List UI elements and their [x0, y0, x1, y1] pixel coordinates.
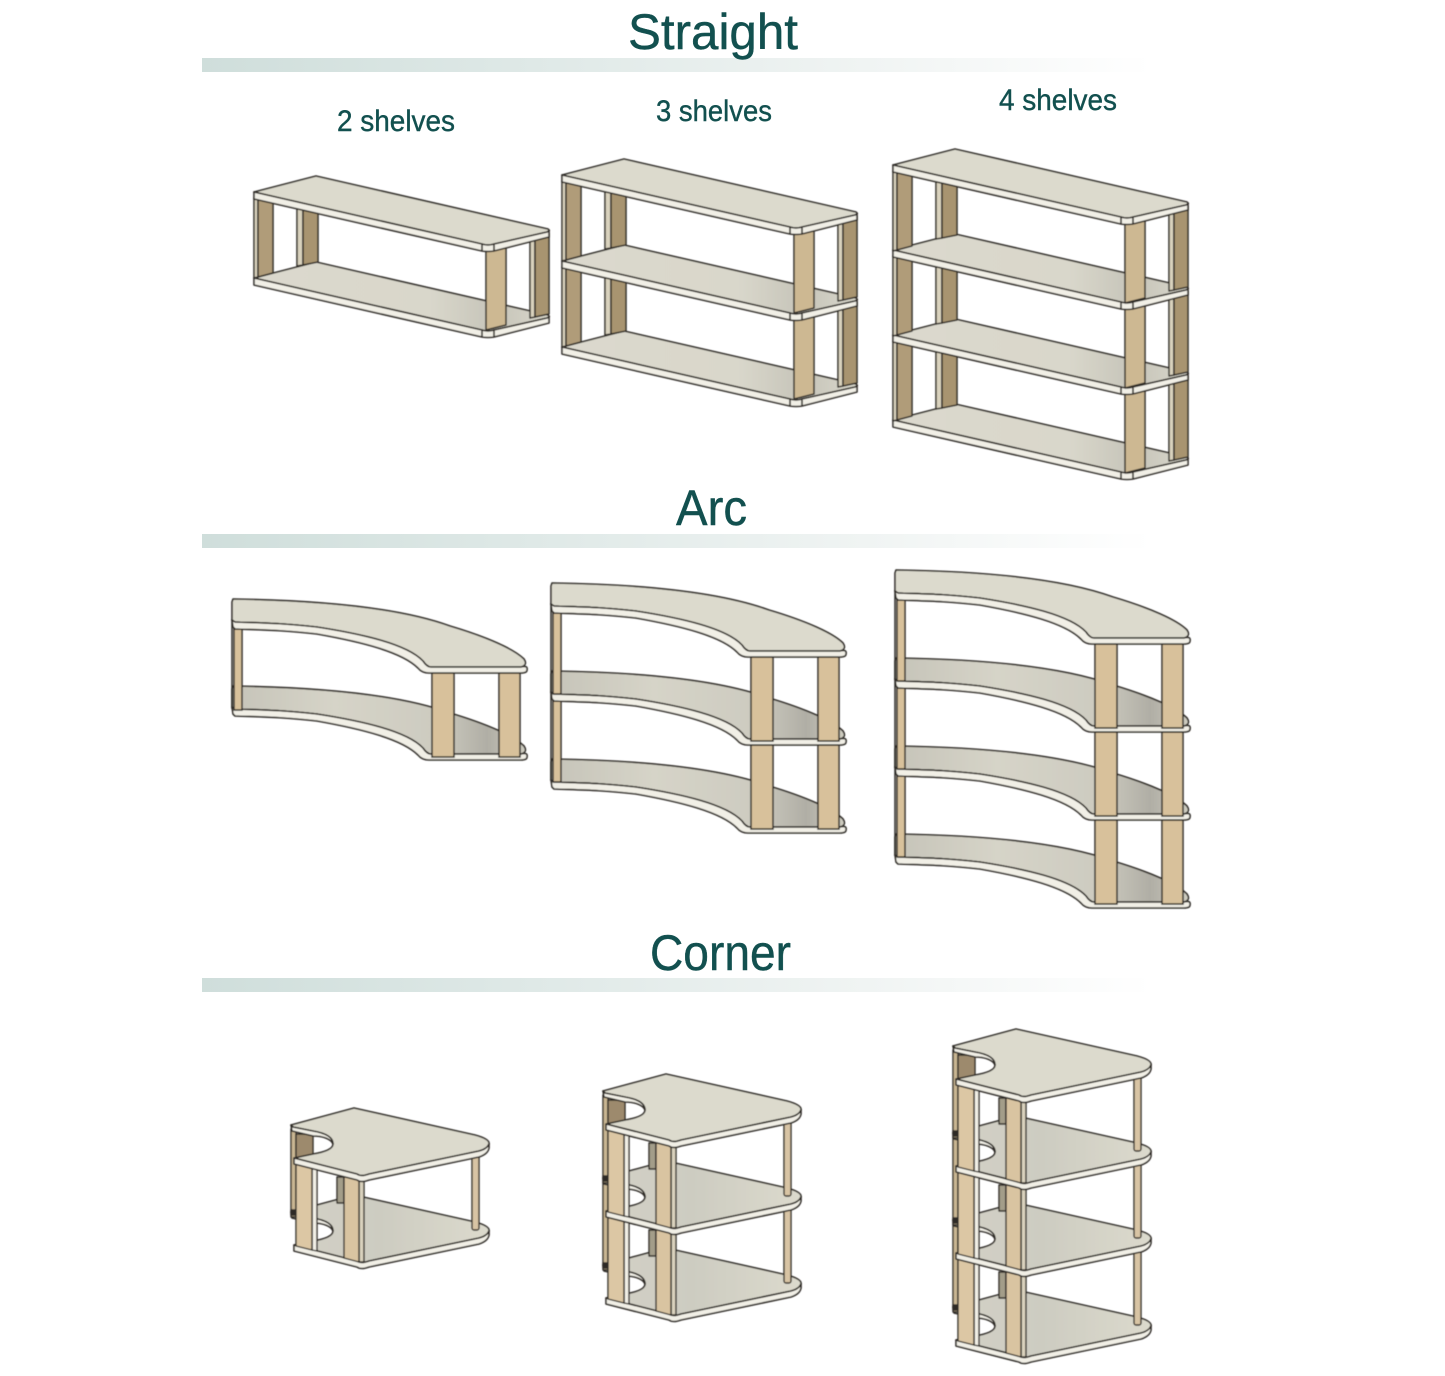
section: Straight	[202, 4, 1188, 480]
unit: straight 2 shelves	[254, 176, 549, 338]
unit: corner 4 shelves	[953, 1029, 1151, 1364]
divider bar: Straight	[202, 58, 1152, 72]
section: Corner	[202, 925, 1152, 1364]
label: 4 shelves: 4 shelves	[999, 84, 1117, 117]
divider bar: Arc	[202, 534, 1152, 548]
unit: arc 3 shelves	[551, 583, 846, 833]
unit: corner 2 shelves	[291, 1108, 489, 1268]
unit: straight 3 shelves	[562, 159, 857, 406]
section: Arc	[202, 480, 1190, 908]
unit: corner 3 shelves	[603, 1074, 801, 1322]
label: 2 shelves: 2 shelves	[337, 105, 455, 138]
unit: arc 2 shelves	[232, 599, 527, 760]
unit: arc 4 shelves	[895, 570, 1190, 908]
label: 3 shelves: 3 shelves	[656, 95, 772, 128]
divider bar: Corner	[202, 978, 1152, 992]
heading: Straight: Straight	[628, 4, 798, 60]
unit: straight 4 shelves	[893, 149, 1188, 480]
heading: Arc: Arc	[676, 480, 747, 536]
heading: Corner: Corner	[650, 925, 791, 981]
